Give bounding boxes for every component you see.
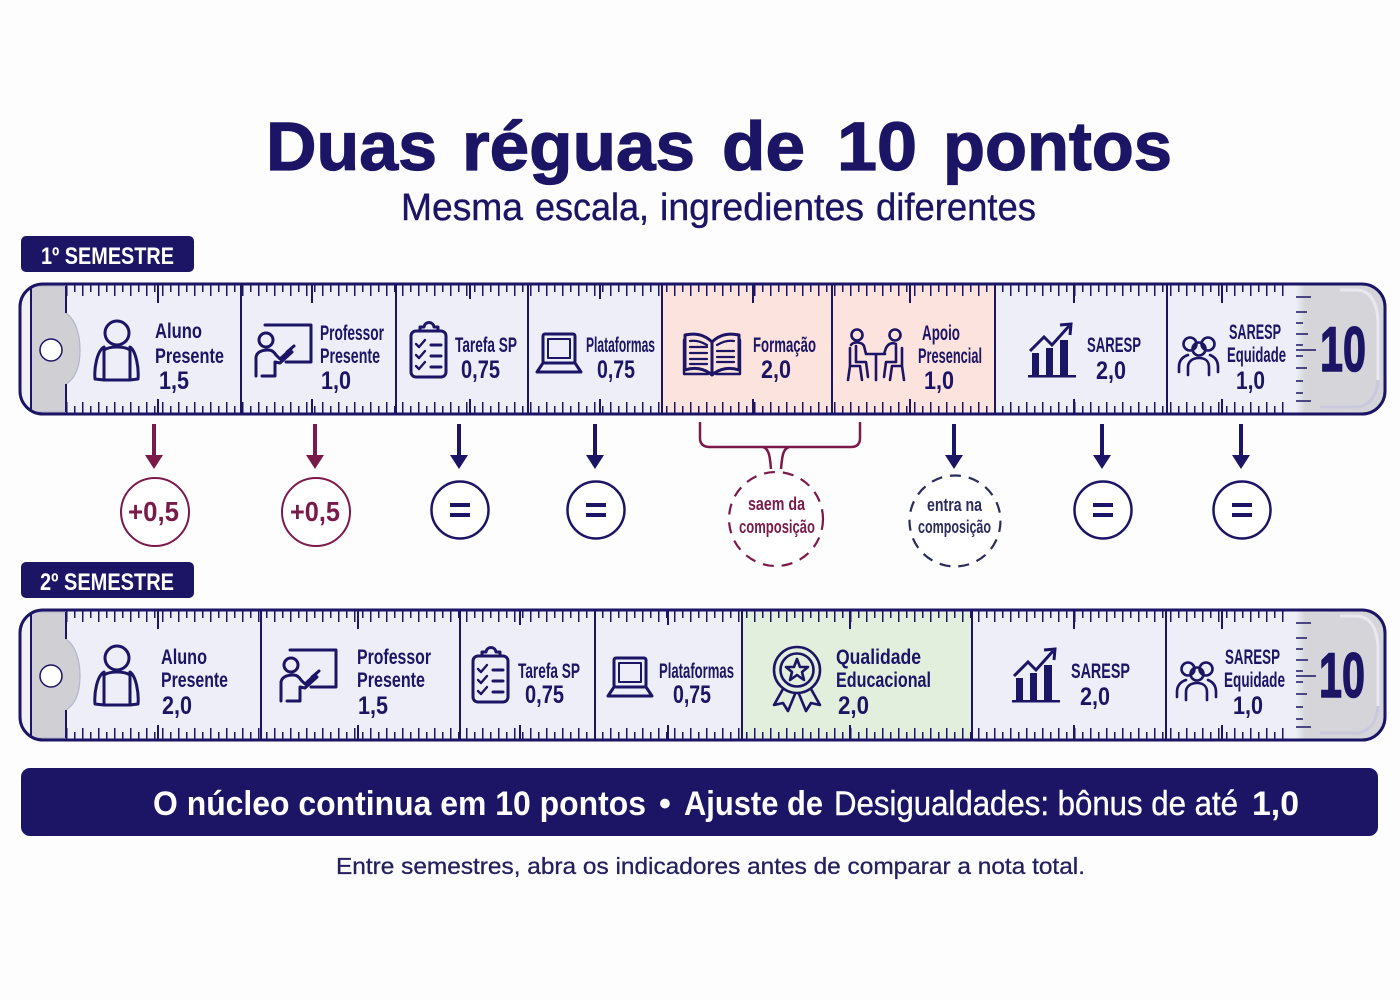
panel: régua do 2º semestre xyxy=(20,610,1386,740)
indicador: Apoio Presencial: Presencial xyxy=(918,345,982,368)
banner xyxy=(21,768,1378,836)
arrow: saresp xyxy=(1093,424,1111,469)
badge: +0,5 professor xyxy=(282,478,350,546)
indicador: SARESP Equidade: SARESP xyxy=(1229,321,1281,344)
indicador: Aluno Presente xyxy=(95,320,224,395)
indicador: Qualidade Educacional xyxy=(774,646,931,720)
subtitle: escala, xyxy=(535,187,649,229)
indicador: SARESP: 2,0 xyxy=(1080,683,1110,711)
title: pontos xyxy=(943,108,1172,185)
indicador: SARESP Equidade: SARESP xyxy=(1225,646,1280,669)
panel: régua do 1º semestre xyxy=(20,284,1386,414)
banner: 1,0 xyxy=(1252,785,1299,823)
banner: Ajuste de xyxy=(684,785,823,823)
arrow: aluno presente xyxy=(145,424,163,469)
badge: igual saresp xyxy=(1074,482,1132,538)
arrow: plataformas xyxy=(586,424,604,469)
title: réguas xyxy=(462,108,695,185)
indicador: Tarefa SP: 0,75 xyxy=(525,681,564,709)
indicador: Formação xyxy=(684,334,816,384)
subtitle xyxy=(401,187,1036,229)
indicador: Plataformas: Plataformas xyxy=(659,660,734,683)
indicador: Plataformas: Plataformas xyxy=(586,334,655,357)
indicador: SARESP Equidade: Equidade xyxy=(1227,344,1286,367)
badge: igual tarefa xyxy=(432,482,488,538)
indicador: Aluno Presente: Aluno xyxy=(161,646,207,669)
badge: 1º semestre xyxy=(21,236,194,272)
indicador: Professor Presente: 1,5 xyxy=(358,692,388,720)
title: 10 xyxy=(837,108,917,185)
indicador: SARESP xyxy=(1012,649,1130,711)
badge: igual equidade xyxy=(1214,482,1270,538)
subtitle: Mesma xyxy=(401,187,524,229)
indicador: Aluno Presente xyxy=(95,646,228,720)
total 10: 10 xyxy=(1319,641,1365,711)
indicador: SARESP Equidade xyxy=(1177,646,1285,720)
indicador: Tarefa SP xyxy=(411,322,517,384)
indicador: Professor Presente: Professor xyxy=(357,646,431,669)
indicador: Apoio Presencial xyxy=(848,322,982,395)
indicador: Qualidade Educacional: Educacional xyxy=(836,669,931,692)
indicador: Professor Presente: Presente xyxy=(320,345,380,368)
arrow: apoio presencial xyxy=(945,424,963,469)
indicador: Aluno Presente: 1,5 xyxy=(159,367,189,395)
indicador: Professor Presente: Professor xyxy=(320,322,384,345)
badge: 1º semestre: 1º SEMESTRE xyxy=(41,243,174,270)
subtitle: diferentes xyxy=(876,187,1036,229)
indicador: Formação: Formação xyxy=(753,334,816,357)
indicador: Apoio Presencial: Apoio xyxy=(922,322,960,345)
indicador: Tarefa SP: Tarefa SP xyxy=(455,334,517,357)
callout: entra na composição xyxy=(910,476,1000,566)
total 10: 10 xyxy=(1320,315,1366,385)
indicador: Aluno Presente: Presente xyxy=(155,345,224,368)
callout: saem da composição: saem da xyxy=(748,494,806,514)
icon: medalha xyxy=(774,647,820,711)
arrow: saresp equidade xyxy=(1232,424,1250,469)
badge: 2º semestre xyxy=(21,562,194,598)
indicador: SARESP xyxy=(1028,324,1141,385)
bracket: formação e apoio xyxy=(700,422,860,469)
indicador: SARESP: 2,0 xyxy=(1096,357,1126,385)
indicador: Plataformas: 0,75 xyxy=(597,356,635,384)
callout: saem da composição: composição xyxy=(739,517,815,537)
banner: O núcleo continua em 10 pontos xyxy=(153,785,646,823)
indicador: Qualidade Educacional: 2,0 xyxy=(838,692,869,720)
indicador: Aluno Presente: Aluno xyxy=(155,320,202,343)
footer note: Entre semestres, abra os indicadores antes de comparar a nota total. xyxy=(336,853,1085,879)
indicador: SARESP: SARESP xyxy=(1087,334,1141,357)
arrow: professor presente xyxy=(306,424,324,469)
indicador: Tarefa SP xyxy=(473,648,580,709)
indicador: SARESP Equidade: 1,0 xyxy=(1236,367,1265,395)
callout: entra na composição: entra na xyxy=(927,495,983,515)
indicador: Plataformas: 0,75 xyxy=(673,681,711,709)
indicador: Formação: 2,0 xyxy=(761,356,791,384)
indicador: Professor Presente xyxy=(256,322,384,395)
indicador: Plataformas xyxy=(537,334,655,384)
indicador: Tarefa SP: 0,75 xyxy=(461,356,500,384)
indicador: Plataformas xyxy=(608,658,734,709)
title: de xyxy=(722,108,805,185)
badge: igual plataformas xyxy=(568,482,624,538)
callout: entra na composição: composição xyxy=(918,517,991,537)
subtitle: ingredientes xyxy=(660,187,864,229)
banner: • xyxy=(659,785,671,823)
indicador: SARESP Equidade: Equidade xyxy=(1224,669,1285,692)
indicador: SARESP Equidade: 1,0 xyxy=(1233,692,1263,720)
arrow: tarefa sp xyxy=(450,424,468,469)
indicador: Professor Presente xyxy=(281,646,431,720)
banner: Desigualdades: bônus de até xyxy=(834,785,1238,823)
indicador: Aluno Presente: Presente xyxy=(161,669,228,692)
indicador: Aluno Presente: 2,0 xyxy=(162,692,192,720)
badge: +0,5 aluno xyxy=(121,478,189,546)
badge: +0,5 professor: +0,5 xyxy=(290,496,340,527)
indicador: Qualidade Educacional: Qualidade xyxy=(836,646,921,669)
indicador: Apoio Presencial: 1,0 xyxy=(924,367,954,395)
title xyxy=(266,108,1172,185)
indicador: Professor Presente: Presente xyxy=(357,669,425,692)
indicador: Professor Presente: 1,0 xyxy=(321,367,351,395)
indicador: SARESP: SARESP xyxy=(1071,660,1130,683)
badge: +0,5 aluno: +0,5 xyxy=(128,496,179,527)
callout: saem da composição xyxy=(729,472,823,566)
indicador: SARESP Equidade xyxy=(1179,321,1286,395)
title: Duas xyxy=(266,108,437,185)
badge: 2º semestre: 2º SEMESTRE xyxy=(40,569,174,596)
indicador: Tarefa SP: Tarefa SP xyxy=(518,660,580,683)
